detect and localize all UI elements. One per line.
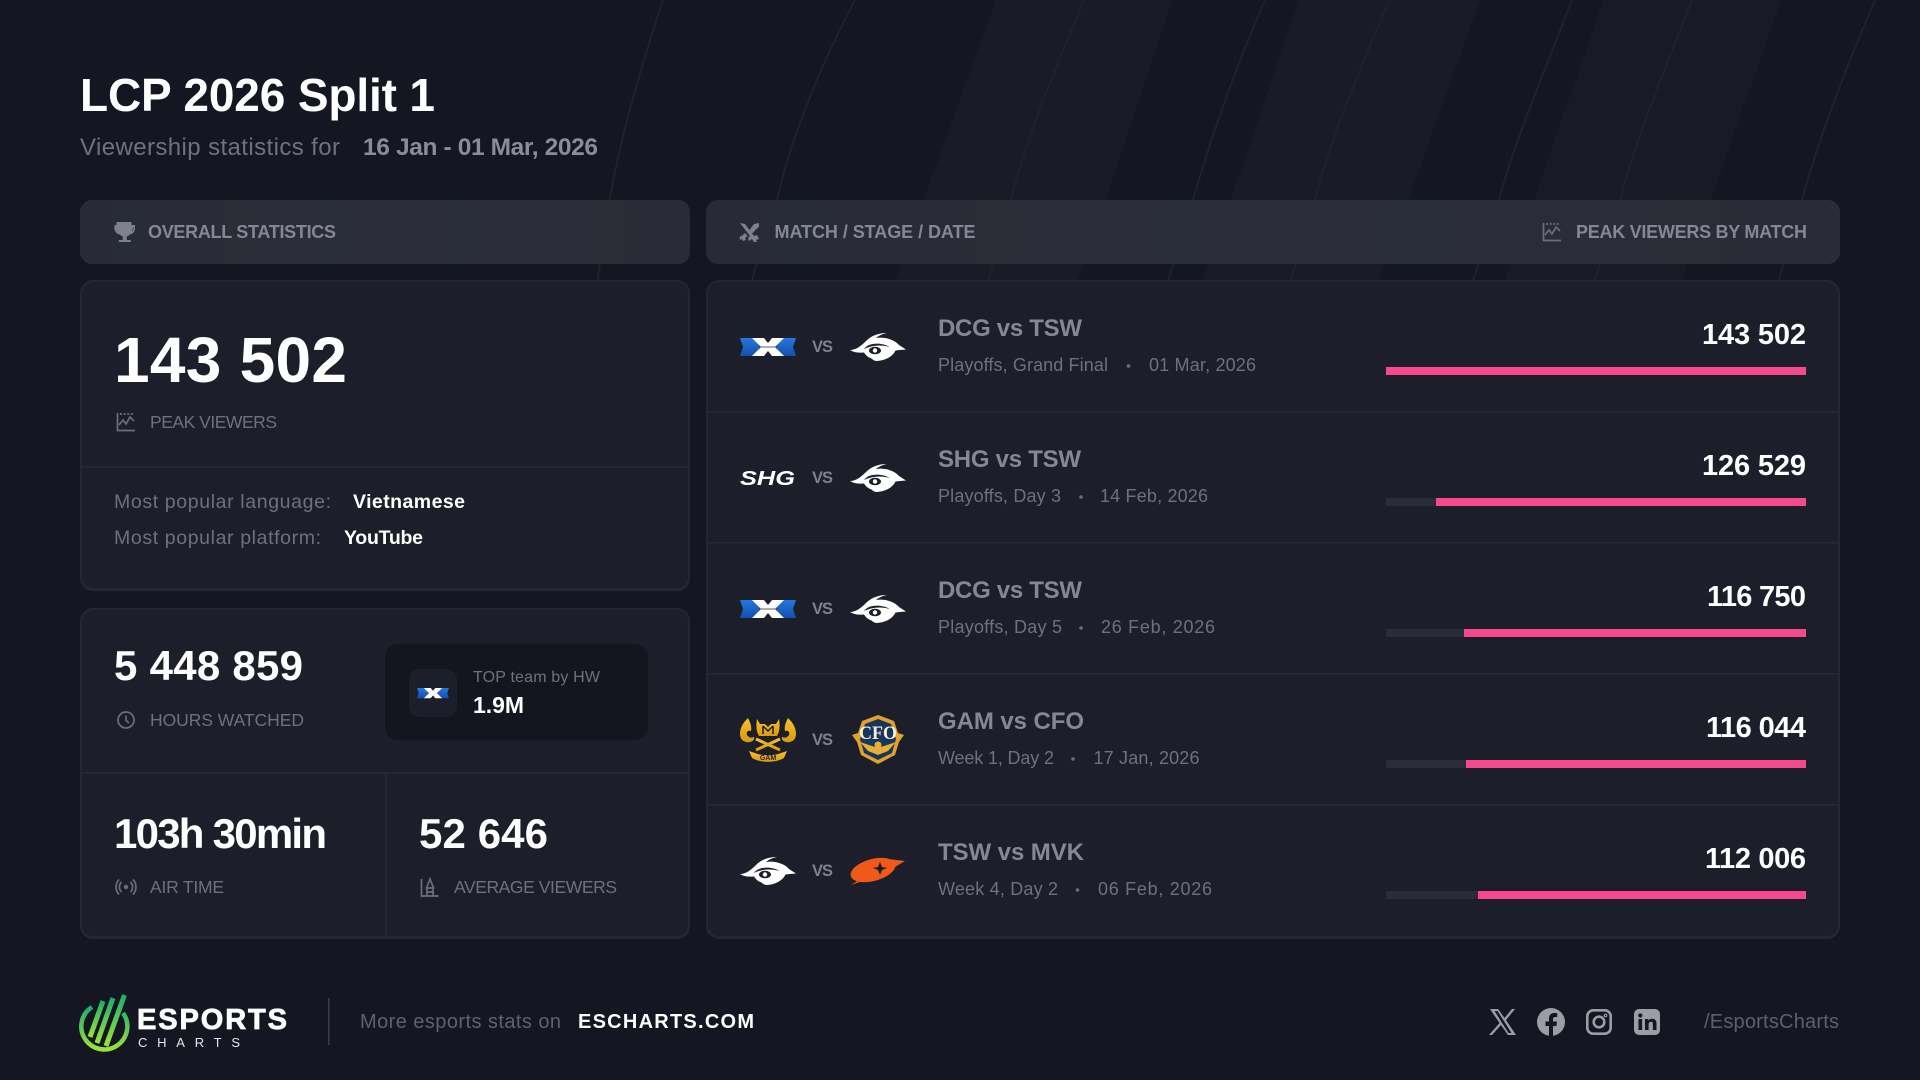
stat: average viewers: AVERAGE VIEWERS [454, 877, 617, 897]
row: DCG vs TSW grand final: DCG vs TSW [938, 315, 1082, 342]
logo: TSW [740, 857, 796, 885]
logo: Esports Charts: CHARTS [138, 1035, 240, 1050]
icon: Facebook [1537, 1008, 1565, 1036]
big number: peak viewers: 143 502 [114, 324, 347, 396]
icon: trophy [114, 222, 135, 242]
row: DCG vs TSW day 5 [740, 577, 1806, 637]
row: DCG vs TSW day 5: VS [812, 600, 833, 618]
stat: average viewers [419, 810, 617, 897]
row: GAM vs CFO [740, 708, 1806, 768]
callout: top team by hours watched: 1.9M [473, 692, 524, 718]
row: DCG vs TSW grand final: 143 502 [1702, 319, 1806, 351]
logo: DCG [740, 338, 796, 356]
panel header: match and peak viewers: PEAK VIEWERS BY MATCH [1576, 222, 1807, 242]
row: SHG vs TSW: 14 Feb, 2026 [1100, 486, 1208, 506]
row: SHG vs TSW: VS [812, 469, 833, 487]
callout: top team by hours watched [385, 644, 648, 740]
panel: peak viewers [80, 280, 690, 591]
label: peak viewers: PEAK VIEWERS [150, 412, 277, 432]
subtitle: 16 Jan - 01 Mar, 2026 [363, 134, 598, 161]
panel: watch statistics [80, 608, 690, 939]
row: GAM vs CFO: VS [812, 731, 833, 749]
row: DCG vs TSW grand final: Playoffs, Grand Final [938, 355, 1108, 375]
row: DCG vs TSW day 5: 26 Feb, 2026 [1101, 617, 1215, 637]
text: more esports stats: More esports stats on [360, 1011, 561, 1033]
text: more esports stats [360, 1011, 754, 1033]
text: most popular platform: Most popular platform: [114, 527, 321, 549]
row: DCG vs TSW grand final: 01 Mar, 2026 [1149, 355, 1256, 375]
row: TSW vs MVK: VS [812, 862, 833, 880]
subtitle: Viewership statistics for [80, 134, 340, 161]
row: TSW vs MVK: 06 Feb, 2026 [1098, 879, 1212, 899]
logo: CFO [852, 715, 904, 764]
stat: air time: 103h 30min [114, 810, 327, 857]
title: LCP 2026 Split 1 [80, 69, 435, 121]
row: DCG vs TSW day 5: 116 750 [1707, 581, 1806, 613]
icon: X [1489, 1009, 1516, 1035]
text: most popular platform: YouTube [344, 527, 423, 549]
logo: SHG: SHG [740, 468, 795, 490]
bar: 112 006 [1386, 891, 1806, 899]
logo: TSW [850, 464, 906, 492]
row: DCG vs TSW day 5: DCG vs TSW [938, 577, 1082, 604]
row: GAM vs CFO: GAM vs CFO [938, 708, 1084, 735]
row: SHG vs TSW [740, 446, 1806, 506]
text: most popular language [114, 491, 465, 513]
stat: air time [114, 810, 327, 897]
text: most popular language: Most popular language: [114, 491, 331, 513]
row: DCG vs TSW grand final [740, 315, 1806, 375]
panel header: overall statistics: OVERALL STATISTICS [148, 222, 336, 242]
logo: TSW [850, 595, 906, 623]
text: most popular language: Vietnamese [353, 491, 465, 513]
row: TSW vs MVK: 112 006 [1705, 843, 1806, 875]
logo: Esports Charts [81, 995, 287, 1050]
logo: GAM [740, 718, 796, 762]
row: DCG vs TSW day 5: Playoffs, Day 5 [938, 617, 1062, 637]
logo: MVK [848, 853, 905, 887]
stat: average viewers: 52 646 [419, 810, 548, 857]
bar: 143 502 [1386, 367, 1806, 375]
row: DCG vs TSW grand final: VS [812, 338, 833, 356]
stat: hours watched: 5 448 859 [114, 642, 303, 689]
panel header: overall statistics [80, 200, 690, 264]
logo: CFO: CFO [859, 723, 897, 744]
row: SHG vs TSW: Playoffs, Day 3 [938, 486, 1061, 506]
row: SHG vs TSW: SHG vs TSW [938, 446, 1081, 473]
row: SHG vs TSW: 126 529 [1702, 450, 1806, 482]
bar: 126 529 [1386, 498, 1806, 506]
panel: match list [706, 280, 1840, 939]
callout: top team by hours watched: TOP team by HW [473, 669, 601, 686]
logo: DCG small [417, 688, 449, 698]
bar: 116 750 [1386, 629, 1806, 637]
footer [81, 995, 1839, 1050]
stat: hours watched: HOURS WATCHED [150, 710, 304, 730]
logo: TSW [850, 333, 906, 361]
icon: peak chart [1544, 223, 1561, 240]
row: GAM vs CFO: 17 Jan, 2026 [1094, 748, 1200, 768]
text: most popular platform [114, 527, 423, 549]
icon: crossed swords [740, 223, 759, 242]
stat: hours watched [114, 642, 304, 730]
logo: DCG [740, 600, 796, 618]
icon: peak chart [118, 413, 135, 430]
text: more esports stats: ESCHARTS.COM [578, 1011, 754, 1033]
stat: air time: AIR TIME [150, 877, 224, 897]
icon: LinkedIn [1634, 1009, 1660, 1035]
icon: Instagram [1587, 1010, 1611, 1034]
row: TSW vs MVK [740, 839, 1806, 899]
bar: 116 044 [1386, 760, 1806, 768]
panel header: match and peak viewers [706, 200, 1840, 264]
text: social handle: /EsportsCharts [1704, 1011, 1839, 1033]
subtitle [80, 134, 598, 161]
row: GAM vs CFO: Week 1, Day 2 [938, 748, 1054, 768]
row: TSW vs MVK: Week 4, Day 2 [938, 879, 1058, 899]
row: TSW vs MVK: TSW vs MVK [938, 839, 1085, 866]
logo: Esports Charts: ESPORTS [137, 1004, 287, 1036]
logo: GAM: GAM [760, 755, 776, 762]
row: GAM vs CFO: 116 044 [1706, 712, 1806, 744]
panel header: match and peak viewers: MATCH / STAGE / DATE [774, 222, 976, 242]
